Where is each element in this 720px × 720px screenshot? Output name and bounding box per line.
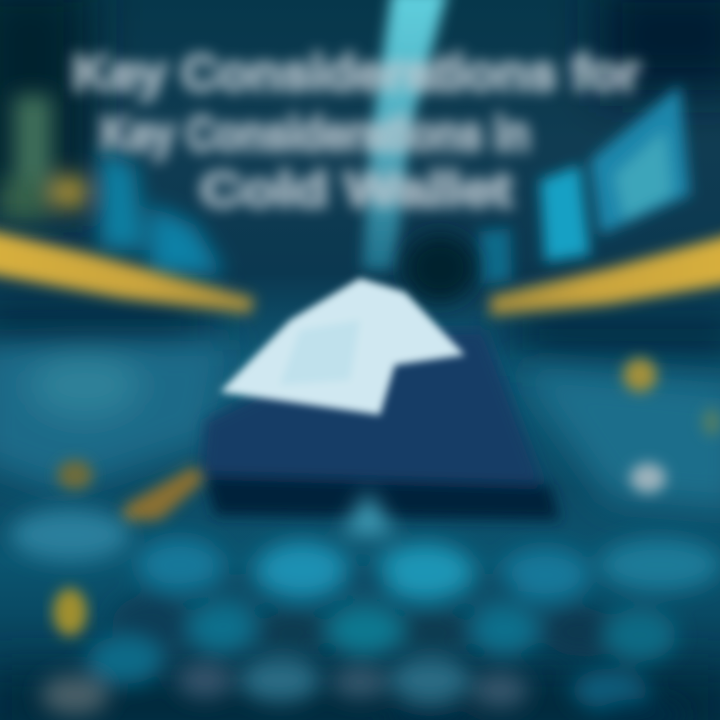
iceberg white peak [220, 278, 465, 415]
title: Cold Wallet [200, 164, 512, 217]
panel: right chart bars [478, 85, 690, 285]
yellow streak right [490, 232, 720, 316]
wallet base: dark blue pyramid [200, 330, 560, 520]
side panel: left blue lines [0, 340, 230, 490]
side panel: right blue lines [515, 365, 720, 510]
light beam [362, 0, 448, 270]
title: Key Considerations in [100, 108, 530, 161]
title [72, 45, 640, 217]
title: Key Considerations for [72, 45, 640, 101]
grid of hexagonal tiles [10, 490, 720, 720]
dark wallet shadow [404, 234, 476, 302]
panel: left chart bars [0, 95, 225, 275]
yellow accents [57, 358, 720, 522]
icon: yellow coin [53, 588, 87, 636]
yellow streak left [0, 228, 255, 314]
